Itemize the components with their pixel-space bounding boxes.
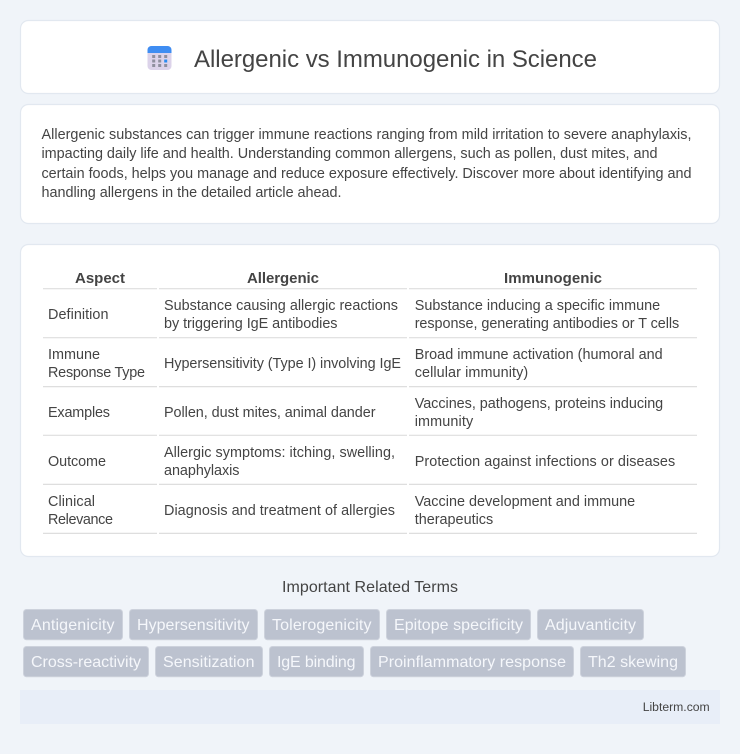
table row: clinical relevance: Clinical	[48, 494, 95, 510]
icon: calendar grid	[148, 46, 172, 70]
tag: ige binding: IgE binding	[277, 654, 356, 671]
table row: examples: Pollen, dust mites, animal dander	[164, 405, 376, 421]
panel: comparison table	[20, 244, 720, 556]
tag: ige binding	[270, 646, 364, 677]
tag: epitope specificity	[386, 610, 530, 640]
table row: definition: response, generating antibodies or T cells	[415, 316, 679, 332]
table row: immune response type: Hypersensitivity (Type I) involving IgE	[164, 356, 401, 372]
tag: antigenicity: Antigenicity	[31, 617, 114, 634]
tag: adjuvanticity: Adjuvanticity	[545, 617, 636, 634]
heading: important related terms: Important Related Terms	[282, 579, 458, 596]
tag: sensitization: Sensitization	[163, 654, 254, 671]
tag: tolerogenicity: Tolerogenicity	[272, 617, 372, 634]
table row: definition: Substance causing allergic reactions	[164, 298, 398, 314]
tag: sensitization	[156, 646, 262, 677]
table header row: Aspect	[75, 270, 125, 287]
table row: clinical relevance: Relevance	[48, 512, 113, 528]
footer source label: Libterm.com	[643, 700, 710, 714]
table row: outcome: Outcome	[48, 454, 106, 470]
text block: introduction paragraph: handling allergens in the detailed article ahead.	[42, 185, 342, 201]
table row: immune response type: cellular immunity)	[415, 365, 528, 381]
table row: immune response type: Broad immune activation (humoral and	[415, 347, 663, 363]
table row: clinical relevance: Diagnosis and treatment of allergies	[164, 503, 395, 519]
tag: proinflammatory response	[370, 646, 574, 677]
table header row: Immunogenic	[504, 270, 602, 287]
tag: cross-reactivity: Cross-reactivity	[31, 654, 141, 671]
tag group: related terms	[24, 610, 686, 677]
tag: proinflammatory response: Proinflammatory response	[378, 654, 566, 671]
text block: introduction paragraph: certain foods, helps you manage and reduce exposure effectively. Discover more about identifying and	[42, 166, 692, 182]
table row: immune response type: Response Type	[48, 365, 145, 381]
table header row: Allergenic	[247, 270, 319, 287]
table row: clinical relevance	[43, 494, 697, 533]
text block: introduction paragraph: impacting daily life and health. Understanding common allergens, such as pollen, dust mites, and	[42, 146, 658, 162]
tag: th2 skewing: Th2 skewing	[588, 654, 678, 671]
tag: epitope specificity: Epitope specificity	[394, 617, 523, 634]
table row: examples: immunity	[415, 414, 474, 430]
table row: definition: by triggering IgE antibodies	[164, 316, 338, 332]
tag: adjuvanticity	[538, 610, 644, 640]
table row: clinical relevance: Vaccine development and immune	[415, 494, 635, 510]
text block: introduction paragraph	[42, 127, 692, 201]
table row: outcome: anaphylaxis	[164, 463, 240, 479]
table row: examples: Vaccines, pathogens, proteins inducing	[415, 396, 663, 412]
text block: introduction paragraph: Allergenic substances can trigger immune reactions ranging from mild irritation to severe anaphylaxis,	[42, 127, 692, 143]
table row: definition: Definition	[48, 307, 108, 323]
footer	[20, 690, 720, 724]
tag: cross-reactivity	[24, 646, 148, 677]
tag: hypersensitivity: Hypersensitivity	[137, 617, 250, 634]
table row: outcome: Allergic symptoms: itching, swelling,	[164, 445, 395, 461]
tag: antigenicity	[24, 610, 122, 640]
table row: outcome	[43, 445, 697, 484]
table row: examples	[43, 396, 697, 435]
panel: introduction	[20, 104, 720, 224]
table row: immune response type: Immune	[48, 347, 100, 363]
tag: hypersensitivity	[130, 610, 258, 640]
table row: definition	[43, 298, 697, 338]
table row: examples: Examples	[48, 405, 110, 421]
table row: outcome: Protection against infections or diseases	[415, 454, 675, 470]
table row: immune response type	[43, 347, 697, 387]
table row: definition: Substance inducing a specific immune	[415, 298, 660, 314]
title: Allergenic vs Immunogenic in Science	[194, 46, 597, 73]
table header row	[43, 270, 697, 289]
panel: header	[20, 20, 720, 94]
tag: th2 skewing	[580, 646, 686, 677]
table row: clinical relevance: therapeutics	[415, 512, 493, 528]
tag: tolerogenicity	[264, 610, 380, 640]
